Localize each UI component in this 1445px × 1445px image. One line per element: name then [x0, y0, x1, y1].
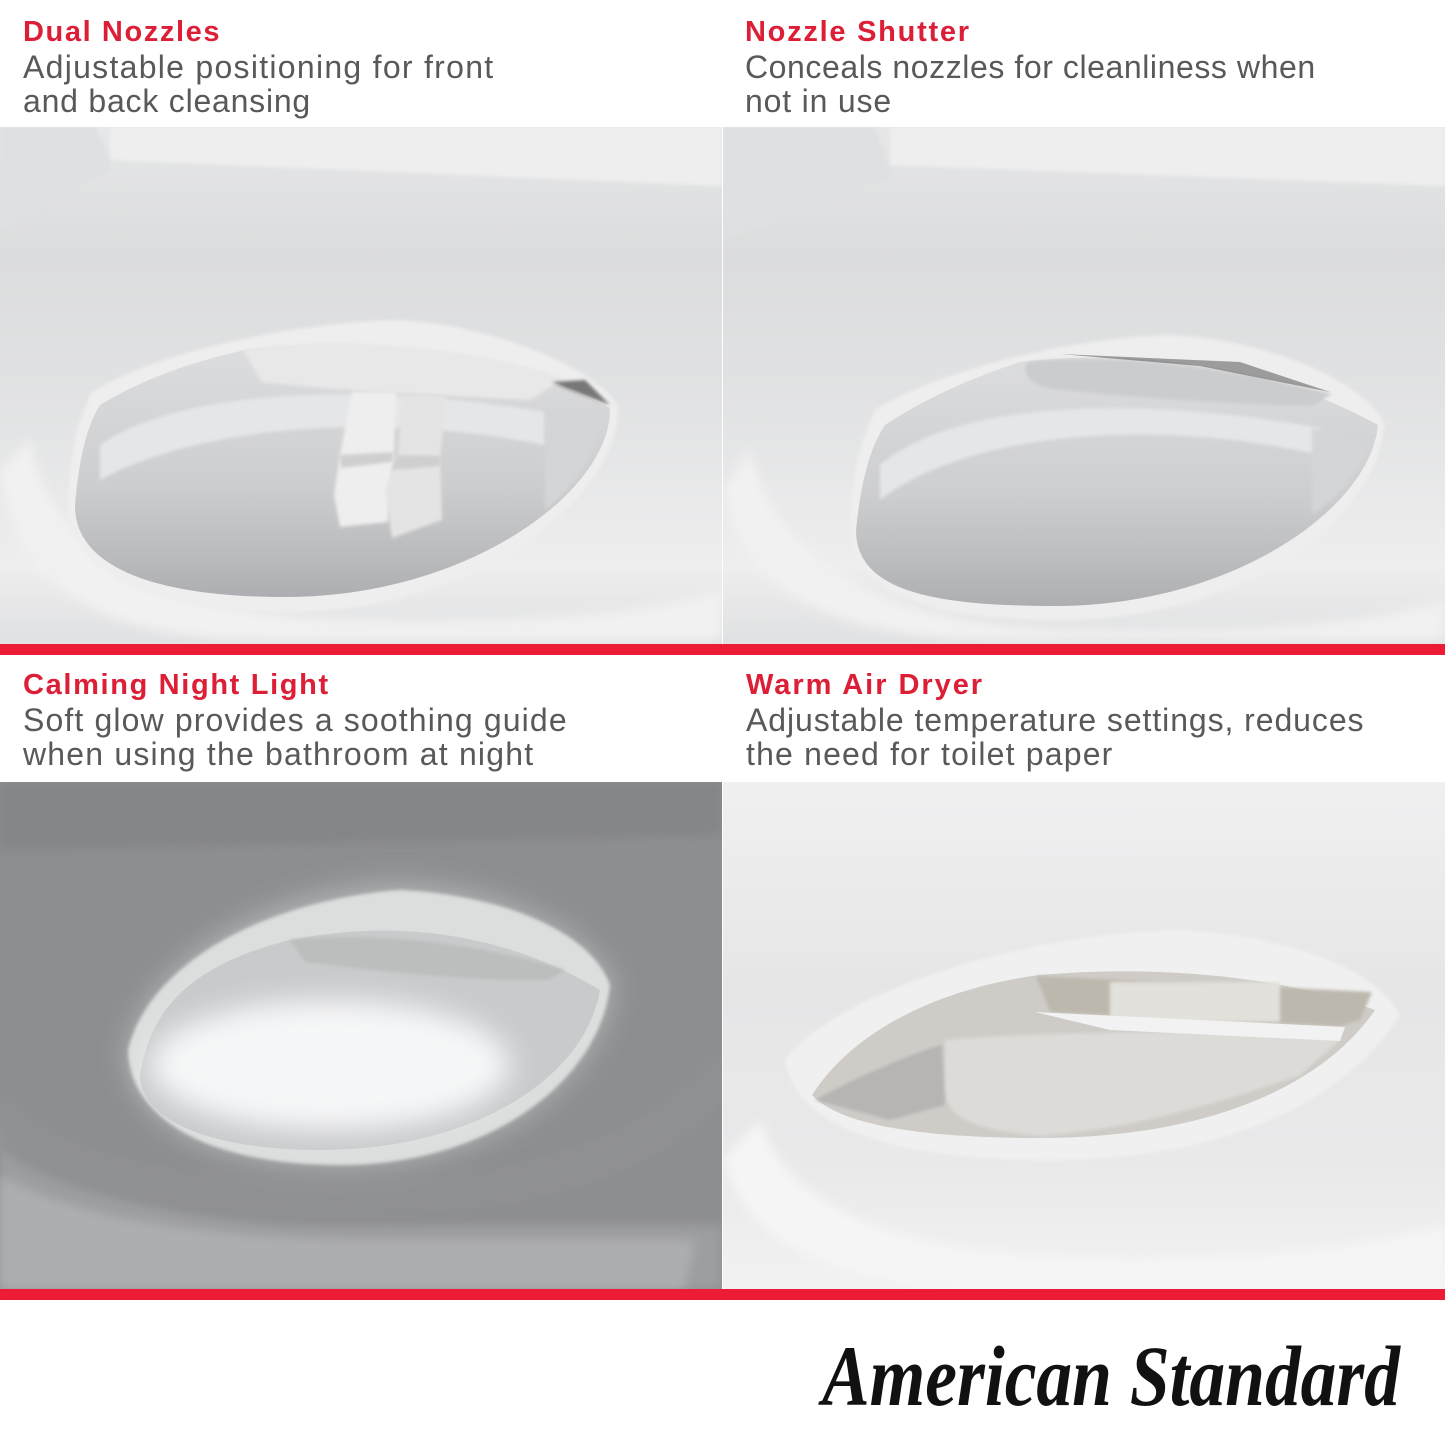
bowl rim — [68, 320, 618, 612]
bowl rim — [850, 335, 1384, 620]
caption: calming night light: Calming Night Light — [23, 669, 330, 701]
caption: dual nozzles: and back cleansing — [23, 83, 311, 119]
caption: warm air dryer — [746, 669, 1364, 772]
bowl interior — [812, 971, 1375, 1138]
panel: warm air dryer photo — [723, 782, 1445, 1289]
panel: nozzle shutter photo — [723, 127, 1445, 644]
shutter door open — [1035, 1012, 1345, 1041]
bowl interior — [856, 358, 1378, 606]
caption: dual nozzles — [23, 16, 494, 119]
caption: calming night light — [23, 669, 568, 772]
caption: warm air dryer: Warm Air Dryer — [746, 669, 984, 701]
caption: warm air dryer: Adjustable temperature settings, reduces — [746, 702, 1364, 738]
panel: night light photo — [0, 782, 722, 1289]
panel: dual nozzles photo — [0, 127, 722, 644]
caption: nozzle shutter: Conceals nozzles for cleanliness when — [745, 48, 1316, 84]
nozzle shutter housing — [243, 343, 565, 400]
nozzles — [334, 392, 396, 527]
red divider top — [0, 644, 1445, 655]
shutter — [1025, 359, 1332, 406]
caption: calming night light: Soft glow provides a soothing guide — [23, 702, 568, 738]
caption: dual nozzles: Dual Nozzles — [23, 16, 221, 48]
bowl rim — [788, 945, 1398, 1100]
caption: warm air dryer: the need for toilet paper — [746, 736, 1114, 772]
red divider bottom — [0, 1289, 1445, 1300]
caption: dual nozzles: Adjustable positioning for front — [23, 48, 494, 84]
caption: nozzle shutter: Nozzle Shutter — [745, 16, 971, 48]
glowing bowl interior — [140, 931, 600, 1150]
caption: calming night light: when using the bathroom at night — [23, 736, 534, 772]
open nozzle bay — [1036, 976, 1372, 1026]
bowl interior — [75, 345, 610, 597]
caption: nozzle shutter: not in use — [745, 83, 892, 119]
caption: nozzle shutter — [745, 16, 1316, 119]
glowing bowl rim — [128, 885, 612, 1165]
